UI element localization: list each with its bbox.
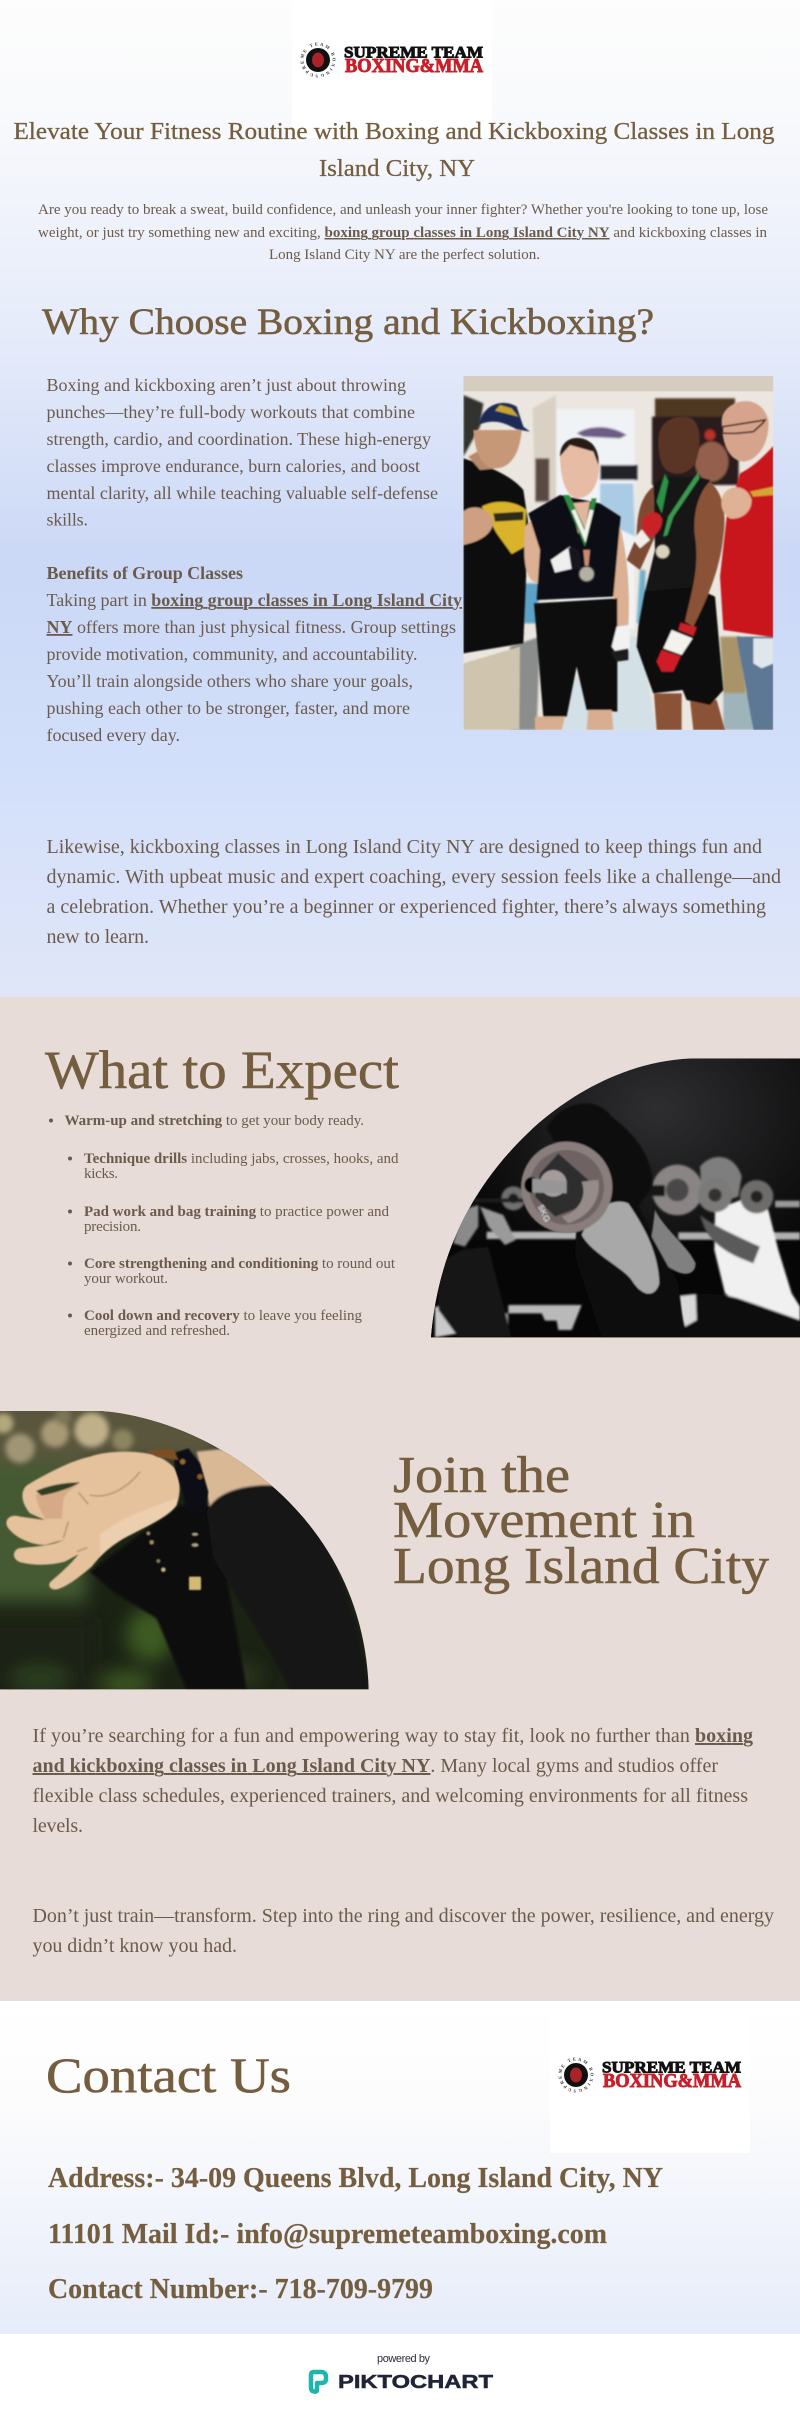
list item: cool down xyxy=(68,1308,362,1339)
icon: piktochart mark xyxy=(311,2372,326,2392)
heading: what to expect: What to Expect xyxy=(45,1040,399,1100)
text block: why choose body xyxy=(46,375,438,530)
intro text: weight, or just try something new and exciting, boxing group classes in Long Island City NY and kickboxing classes in xyxy=(38,225,768,241)
list item: technique drills: Technique drills including jabs, crosses, hooks, and xyxy=(84,1151,399,1167)
photo: barbell squat class xyxy=(431,1058,800,1338)
heading: join the movement xyxy=(393,1447,769,1595)
text block: benefits of group classes: focused every day. xyxy=(46,725,180,745)
text block: search paragraph: flexible class schedules, experienced trainers, and welcoming environments for all fitness xyxy=(32,1785,748,1807)
text block: why choose body: strength, cardio, and coordination. These high-energy xyxy=(46,429,431,449)
list item: warm-up: Warm-up and stretching to get your body ready. xyxy=(64,1113,364,1129)
photo: four boxers with medals xyxy=(463,376,774,730)
logo: supreme team contact: SUPREME TEAM BOXING xyxy=(558,2058,594,2092)
text block: kickboxing classes: new to learn. xyxy=(46,926,149,948)
logo: supreme team top xyxy=(295,42,490,138)
text block: kickboxing classes: a celebration. Whether you’re a beginner or experienced fighter, there’s always something xyxy=(46,896,766,918)
text block: why choose body: Boxing and kickboxing aren’t just about throwing xyxy=(46,375,406,395)
list item: technique drills: kicks. xyxy=(84,1166,118,1182)
list item: cool down: energized and refreshed. xyxy=(84,1323,230,1339)
logo: supreme team top: SUPREME TEAM xyxy=(344,44,483,62)
logo: supreme team top: BOXING&MMA xyxy=(345,56,483,77)
title: Elevate Your Fitness Routine with Boxing and Kickboxing Classes in Long xyxy=(14,119,775,145)
man 3 xyxy=(654,693,725,730)
list item: pad work xyxy=(68,1204,390,1235)
text block: contact details: Contact Number:- 718-709-9799 xyxy=(48,2274,433,2305)
logo: supreme team contact: SUPREME TEAM xyxy=(602,2060,741,2076)
text block: kickboxing classes: dynamic. With upbeat music and expert coaching, every session feels like a challenge—and xyxy=(46,866,781,888)
heading: join the movement: Movement in xyxy=(393,1492,695,1549)
footer: powered by piktochart xyxy=(311,2353,494,2392)
photo: meditating hand with beads xyxy=(0,1411,369,1690)
text block: benefits of group classes: NY offers more than just physical fitness. Group settings xyxy=(46,617,456,637)
heading: join the movement: Long Island City xyxy=(393,1538,769,1595)
text block: kickboxing classes: Likewise, kickboxing classes in Long Island City NY are designed to keep things fun and xyxy=(46,836,762,858)
list item: pad work: precision. xyxy=(84,1219,141,1235)
footer: powered by piktochart: PIKTOCHART xyxy=(338,2371,494,2392)
list: what to expect xyxy=(49,1113,399,1339)
text block: benefits of group classes: Benefits of Group Classes xyxy=(46,563,243,583)
text block: contact details: 11101 Mail Id:- info@supremeteamboxing.com xyxy=(48,2219,607,2250)
list item: technique drills xyxy=(68,1151,399,1182)
text block: search paragraph: If you’re searching for a fun and empowering way to stay fit, look no further than boxing xyxy=(32,1725,753,1747)
list item: core strengthening xyxy=(68,1256,396,1287)
text block: why choose body: mental clarity, all while teaching valuable self-defense xyxy=(46,483,438,503)
list item: pad work: Pad work and bag training to practice power and xyxy=(84,1204,390,1220)
list item: core strengthening: your workout. xyxy=(84,1271,168,1287)
intro text: Long Island City NY are the perfect solution. xyxy=(269,247,540,263)
text block: benefits of group classes: You’ll train alongside others who share your goals, xyxy=(46,671,413,691)
text block: benefits of group classes: Taking part in boxing group classes in Long Island City xyxy=(46,590,462,610)
list item: cool down: Cool down and recovery to leave you feeling xyxy=(84,1308,362,1324)
text block: benefits of group classes: pushing each other to be stronger, faster, and more xyxy=(46,698,410,718)
panel: contact background xyxy=(0,2001,800,2334)
logo: supreme team contact xyxy=(558,2058,742,2092)
text block: contact details xyxy=(48,2163,663,2305)
panel: intro and why choose background xyxy=(0,0,800,997)
text block: benefits of group classes: provide motivation, community, and accountability. xyxy=(46,644,418,664)
text block: search paragraph: and kickboxing classes in Long Island City NY. Many local gyms and studios offer xyxy=(32,1755,718,1777)
footer: powered by piktochart: powered by xyxy=(377,2353,430,2365)
text block: transform paragraph: you didn’t know you had. xyxy=(32,1935,237,1957)
panel: footer background xyxy=(0,2334,800,2414)
text block: search paragraph xyxy=(32,1725,753,1837)
text block: why choose body: skills. xyxy=(46,510,88,530)
text block: kickboxing classes xyxy=(46,836,781,948)
boy xyxy=(524,517,557,583)
photo: barbell squat class: 5KG xyxy=(536,1203,553,1224)
title xyxy=(14,119,775,182)
man 1 xyxy=(463,647,520,730)
logo: supreme team top: SUPREME TEAM BOXING xyxy=(300,42,336,78)
heading: join the movement: Join the xyxy=(393,1447,570,1504)
logo: supreme team contact: BOXING&MMA xyxy=(603,2071,741,2092)
title: Island City, NY xyxy=(319,156,475,182)
list item: core strengthening: Core strengthening and conditioning to round out xyxy=(84,1256,396,1272)
text block: benefits of group classes xyxy=(46,563,462,745)
text block: why choose body: classes improve endurance, burn calories, and boost xyxy=(46,456,420,476)
text block: transform paragraph: Don’t just train—transform. Step into the ring and discover the power, resilience, and energy xyxy=(32,1905,774,1927)
man 4 xyxy=(737,637,773,730)
text block: search paragraph: levels. xyxy=(32,1815,83,1837)
panel: what to expect and join background xyxy=(0,997,800,2001)
text block: why choose body: punches—they’re full-body workouts that combine xyxy=(46,402,415,422)
heading: contact us: Contact Us xyxy=(46,2047,291,2103)
text block: contact details: Address:- 34-09 Queens Blvd, Long Island City, NY xyxy=(48,2163,663,2194)
intro text: Are you ready to break a sweat, build confidence, and unleash your inner fighter? Whether you're looking to tone up, lose xyxy=(38,202,768,218)
intro text xyxy=(38,202,768,263)
text block: transform paragraph xyxy=(32,1905,774,1957)
heading: why choose: Why Choose Boxing and Kickboxing? xyxy=(42,302,654,343)
